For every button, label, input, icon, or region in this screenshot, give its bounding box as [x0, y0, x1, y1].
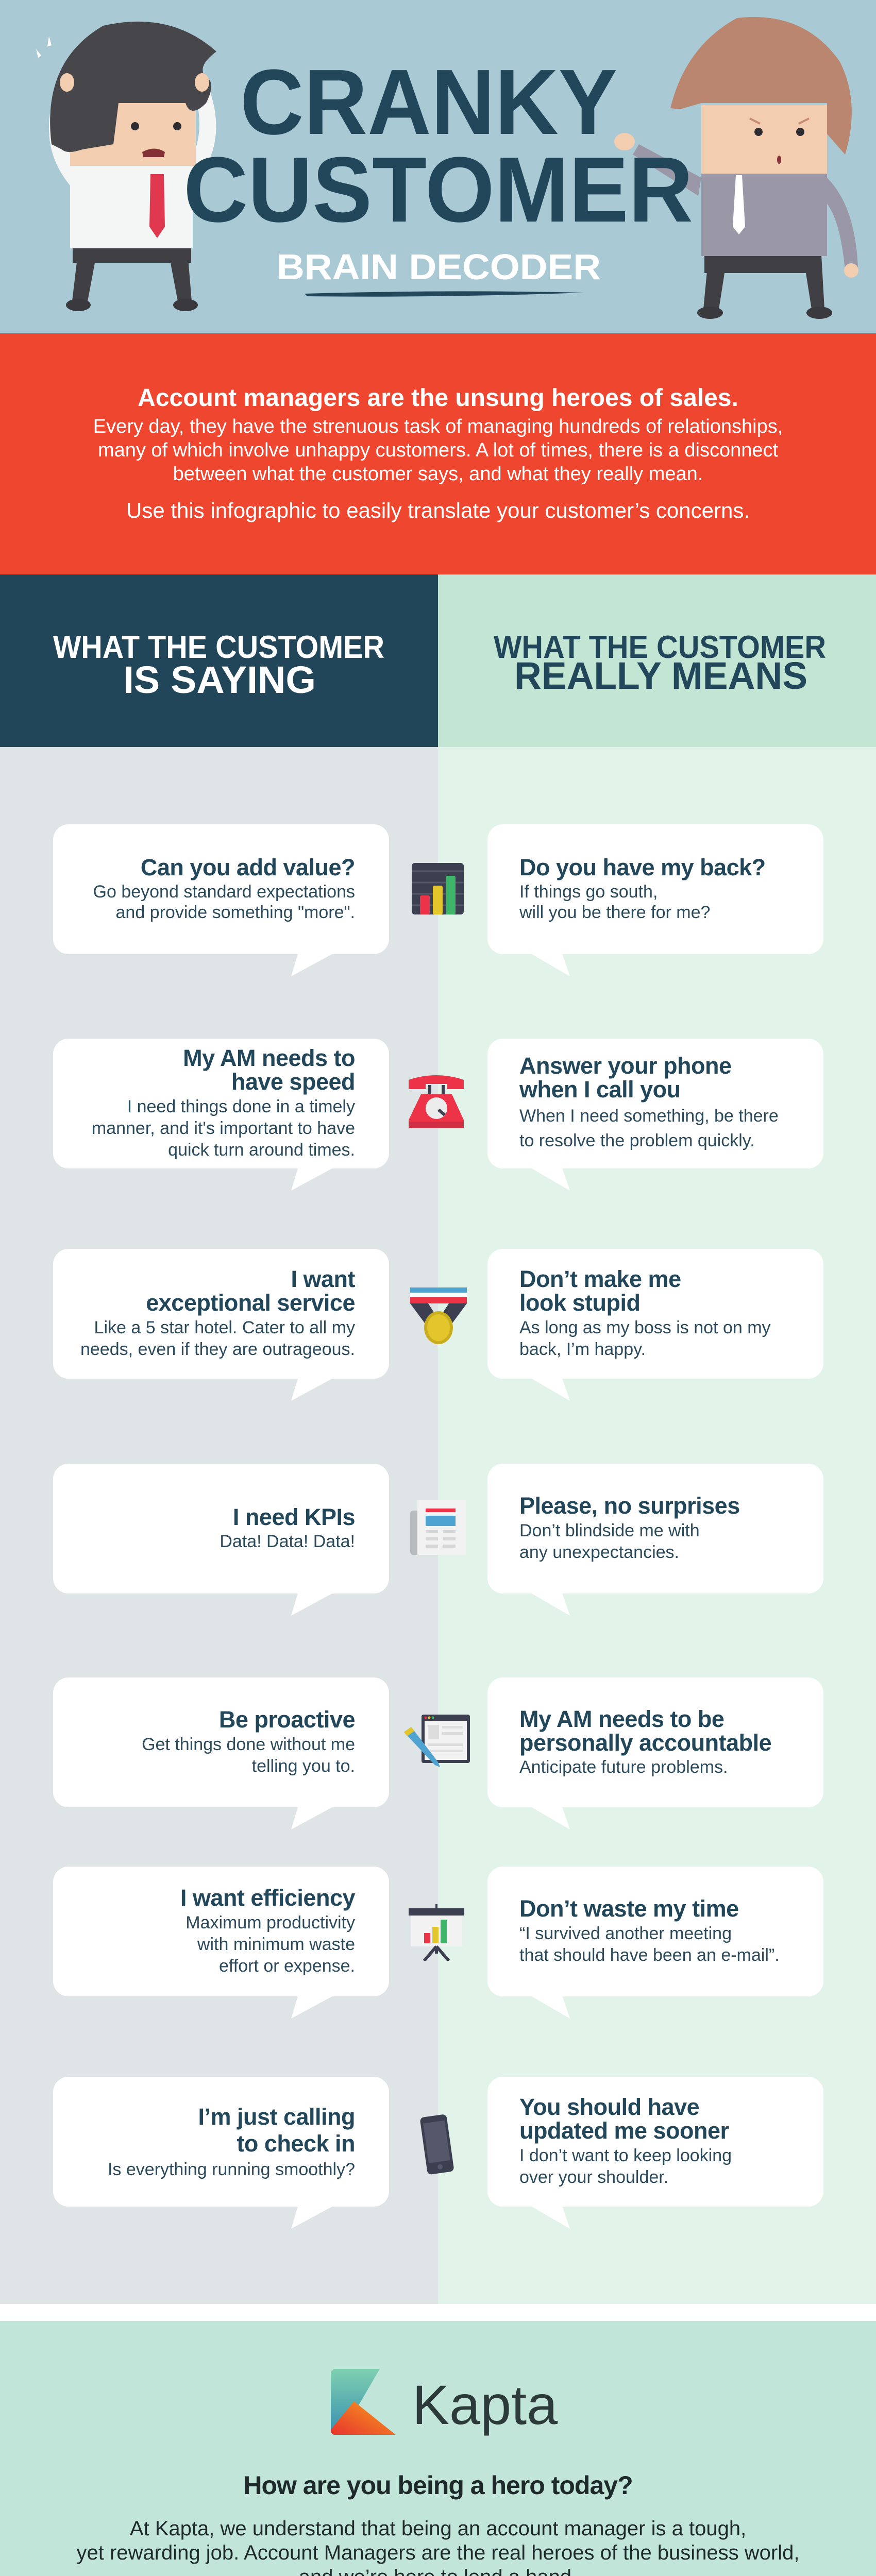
card: can you add value: [53, 824, 389, 954]
card: KPIs: I need KPIs: [233, 1504, 355, 1530]
column header: saying: IS SAYING: [123, 658, 316, 701]
card: can you add value: Go beyond standard expectations: [93, 882, 355, 902]
card: speed: quick turn around times.: [168, 1140, 355, 1160]
card: be proactive: [53, 1677, 389, 1807]
card: answer phone: to resolve the problem quickly.: [519, 1131, 755, 1150]
card: can you add value: Can you add value?: [141, 854, 355, 880]
header banner: [0, 0, 876, 333]
card: exceptional service: Like a 5 star hotel. Cater to all my: [94, 1318, 355, 1337]
card: exceptional service: exceptional service: [146, 1290, 355, 1316]
card: updated me sooner: over your shoulder.: [519, 2167, 668, 2187]
card: be proactive: telling you to.: [252, 1756, 355, 1776]
card: be proactive: Get things done without me: [142, 1735, 355, 1754]
intro body: Every day, they have the strenuous task of managing hundreds of relationships,: [93, 416, 783, 437]
card: exceptional service: needs, even if they are outrageous.: [80, 1340, 355, 1359]
card: updated me sooner: updated me sooner: [519, 2117, 729, 2144]
column header: means: WHAT THE CUSTOMER: [494, 630, 826, 665]
title: CRANKY CUSTOMER: CUSTOMER: [183, 138, 693, 242]
body background right: [438, 747, 876, 2304]
card: don't make me look stupid: Don’t make me: [519, 1266, 681, 1292]
card: accountable: Anticipate future problems.: [519, 1757, 728, 1777]
intro panel: [0, 333, 876, 574]
logo: Kapta: [331, 2369, 558, 2436]
card: KPIs: [53, 1464, 389, 1594]
card: no surprises: Please, no surprises: [519, 1493, 740, 1519]
card: accountable: My AM needs to be: [519, 1706, 724, 1732]
icon: bar chart: [412, 863, 464, 914]
card: answer phone: Answer your phone: [519, 1053, 732, 1079]
footer body: [76, 2517, 800, 2576]
title: CRANKY CUSTOMER: BRAIN DECODER: [277, 247, 601, 287]
logo: Kapta: Kapta: [412, 2374, 558, 2436]
card: efficiency: effort or expense.: [219, 1956, 355, 1976]
card: have my back: If things go south,: [519, 882, 658, 902]
card: waste my time: that should have been an e-mail”.: [519, 1945, 780, 1965]
card: efficiency: [53, 1867, 389, 1996]
card: don't make me look stupid: [487, 1249, 823, 1379]
card: efficiency: I want efficiency: [180, 1885, 355, 1911]
illustration: angry man: [614, 17, 858, 319]
intro body: [93, 416, 783, 485]
card: updated me sooner: [487, 2077, 823, 2207]
card: waste my time: “I survived another meeting: [519, 1924, 732, 1943]
column header: means: REALLY MEANS: [514, 654, 807, 697]
card: efficiency: Maximum productivity: [186, 1913, 355, 1933]
card: speed: I need things done in a timely: [127, 1097, 355, 1116]
card: calling to check in: [53, 2077, 389, 2207]
icon: report document: [410, 1500, 466, 1555]
card: accountable: personally accountable: [519, 1730, 771, 1756]
footer body: At Kapta, we understand that being an account manager is a tough,: [130, 2517, 746, 2540]
card: waste my time: Don’t waste my time: [519, 1895, 739, 1922]
title: CRANKY CUSTOMER: CRANKY: [240, 50, 617, 154]
card: speed: have speed: [231, 1069, 355, 1095]
card: accountable: [487, 1677, 823, 1807]
card: don't make me look stupid: back, I’m happy.: [519, 1340, 646, 1359]
card: don't make me look stupid: look stupid: [519, 1290, 640, 1316]
card: have my back: will you be there for me?: [519, 903, 710, 922]
title: CRANKY CUSTOMER: [183, 50, 693, 297]
intro call: Use this infographic to easily translate your customer’s concerns.: [126, 498, 750, 522]
card: exceptional service: [53, 1249, 389, 1379]
card: answer phone: [487, 1039, 823, 1168]
card: updated me sooner: I don’t want to keep looking: [519, 2146, 732, 2165]
card: KPIs: Data! Data! Data!: [220, 1532, 355, 1551]
card: be proactive: Be proactive: [219, 1706, 355, 1733]
card: updated me sooner: You should have: [519, 2094, 699, 2120]
illustration: stressed man: [36, 22, 216, 311]
card: waste my time: [487, 1867, 823, 1996]
intro body: between what the customer says, and what they really mean.: [173, 463, 703, 485]
card: efficiency: with minimum waste: [197, 1935, 355, 1954]
intro heading: Account managers are the unsung heroes of sales.: [138, 384, 738, 412]
footer heading: How are you being a hero today?: [243, 2471, 633, 2500]
intro body: many of which involve unhappy customers. A lot of times, there is a disconnect: [98, 439, 778, 461]
card: answer phone: when I call you: [519, 1076, 681, 1103]
card: no surprises: any unexpectancies.: [519, 1543, 679, 1562]
card: can you add value: and provide something "more".: [115, 903, 355, 922]
column header: means: [438, 574, 876, 747]
card: exceptional service: I want: [291, 1266, 355, 1292]
card: don't make me look stupid: As long as my boss is not on my: [519, 1318, 771, 1337]
card: calling to check in: to check in: [237, 2130, 355, 2157]
card: calling to check in: Is everything running smoothly?: [108, 2160, 355, 2179]
icon: easel chart: [409, 1904, 464, 1961]
icon: pencil and window: [404, 1715, 470, 1767]
card: speed: manner, and it's important to have: [92, 1118, 355, 1138]
column header: saying: WHAT THE CUSTOMER: [53, 630, 384, 665]
card: speed: [53, 1039, 389, 1168]
card: have my back: Do you have my back?: [519, 854, 766, 880]
icon: smartphone: [420, 2114, 453, 2174]
card: no surprises: [487, 1464, 823, 1594]
card: have my back: [487, 824, 823, 954]
icon: telephone: [409, 1075, 464, 1128]
card: no surprises: Don’t blindside me with: [519, 1521, 700, 1540]
card: answer phone: When I need something, be there: [519, 1106, 779, 1126]
footer panel: [0, 2321, 876, 2576]
card: speed: My AM needs to: [183, 1045, 355, 1071]
column header: saying: [0, 574, 438, 747]
icon: medal: [410, 1287, 467, 1344]
footer body: yet rewarding job. Account Managers are the real heroes of the business world,: [76, 2541, 800, 2564]
card: calling to check in: I’m just calling: [198, 2104, 355, 2130]
